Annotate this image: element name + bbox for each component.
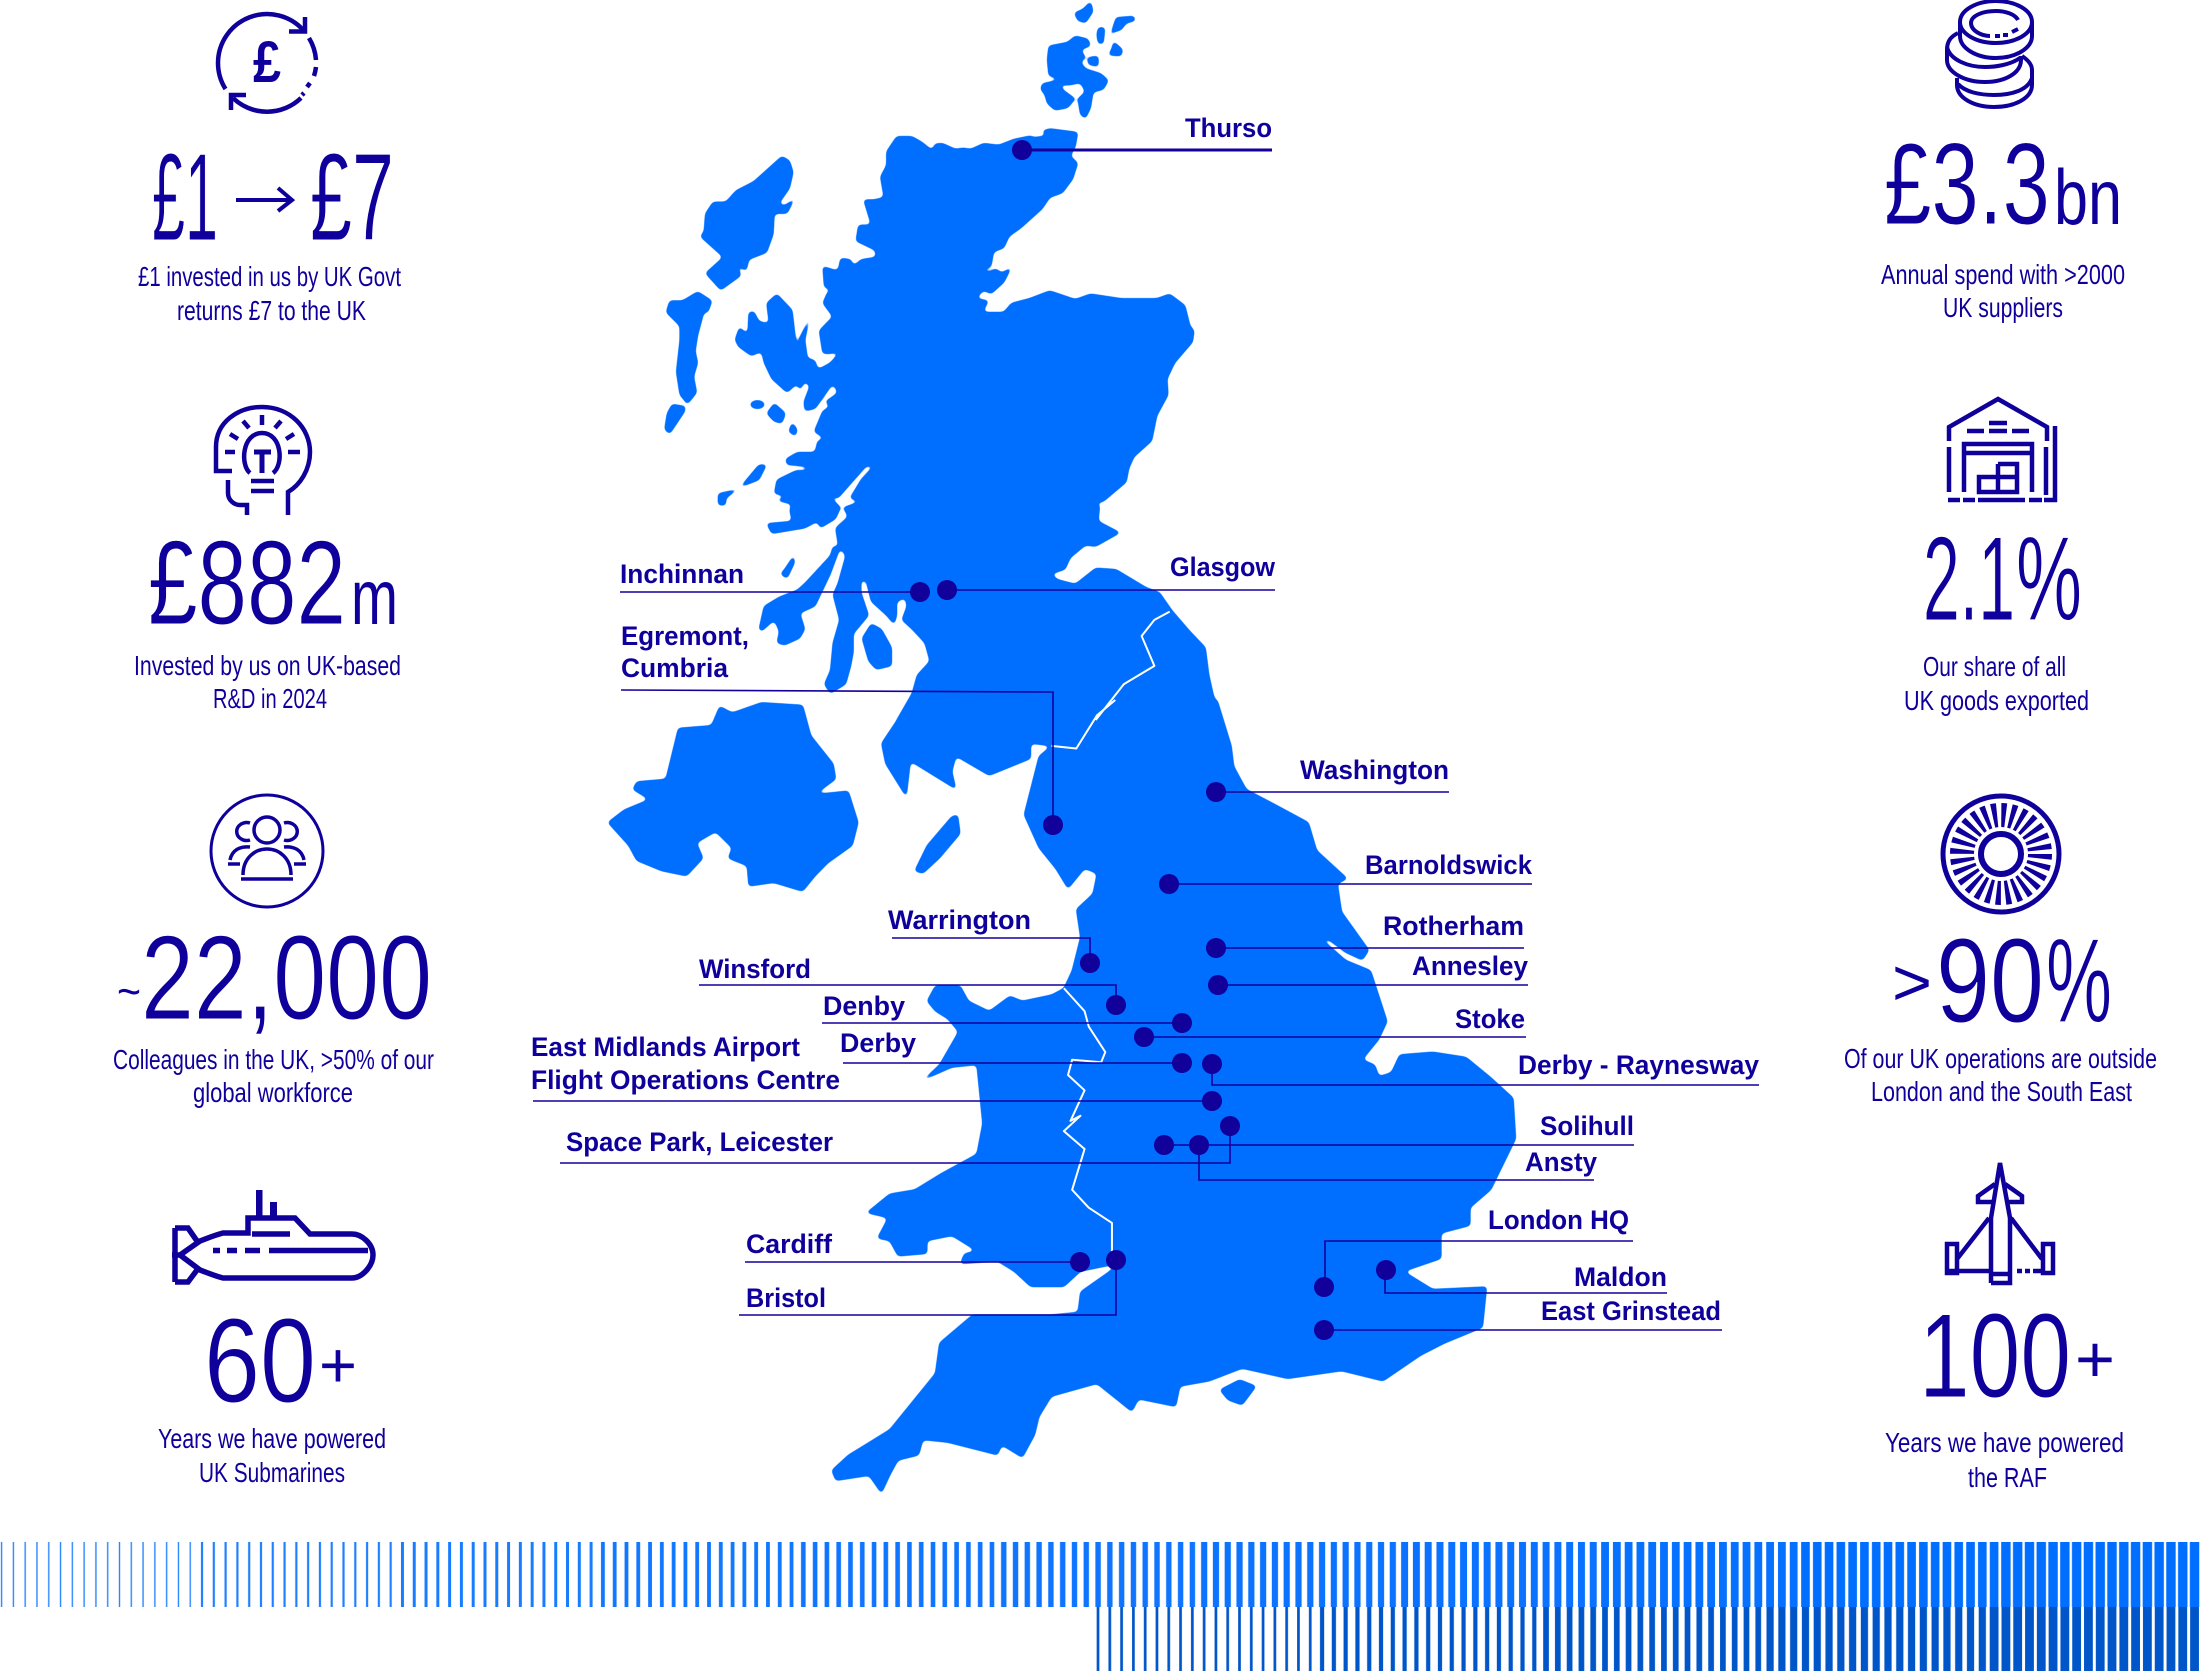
site: Egremont, Cumbria (621, 621, 1063, 835)
caption (134, 650, 401, 714)
site: Rotherham: Rotherham (1383, 911, 1524, 941)
site: Maldon: Maldon (1574, 1262, 1667, 1292)
site: East Grinstead (1314, 1296, 1722, 1340)
caption: Years we have powered (1885, 1427, 2124, 1458)
caption: the RAF (1968, 1462, 2047, 1493)
site: Cardiff (745, 1229, 1090, 1272)
map: Scotland and islands (665, 1, 1221, 720)
site: East Midlands Airport Flight Operations Centre: East Midlands Airport (531, 1032, 800, 1062)
site markers and labels (531, 113, 1759, 1340)
stat: 60+ years submarines (158, 1190, 386, 1488)
caption: R&D in 2024 (213, 683, 327, 714)
icon: stack of coins (1947, 1, 2032, 107)
headline figure: > (1892, 945, 1932, 1019)
icon: warehouse (1948, 399, 2057, 502)
site: Barnoldswick: Barnoldswick (1365, 850, 1533, 880)
site: Rotherham (1206, 911, 1524, 958)
caption (1844, 1043, 2157, 1107)
stat: £3.3bn (1881, 1, 2125, 323)
site: Stoke (1134, 1004, 1526, 1047)
site: Thurso (1012, 113, 1272, 160)
caption (158, 1423, 386, 1488)
caption: £1 invested in us by UK Govt (138, 261, 401, 292)
site: East Midlands Airport Flight Operations Centre (531, 1032, 1222, 1111)
stat: 100+ years RAF (1885, 1163, 2124, 1493)
caption: returns £7 to the UK (177, 295, 366, 326)
site: East Grinstead: East Grinstead (1541, 1296, 1721, 1326)
site: Washington: Washington (1300, 755, 1449, 785)
headline figure: % (2016, 512, 2082, 646)
icon: people in circle (211, 795, 323, 907)
caption (1904, 651, 2089, 716)
headline figure: bn (2054, 153, 2122, 241)
headline figure: % (2046, 914, 2112, 1048)
site: Annesley: Annesley (1412, 951, 1528, 981)
icon: turbine fan (1943, 796, 2059, 912)
caption: UK suppliers (1943, 292, 2063, 323)
caption: UK Submarines (199, 1457, 345, 1488)
caption (1881, 259, 2125, 323)
headline figure: 100 (1919, 1289, 2071, 1423)
map landmass (608, 1, 1516, 1493)
caption (138, 261, 401, 326)
site: London HQ: London HQ (1488, 1205, 1629, 1235)
caption: Our share of all (1923, 651, 2066, 682)
site: Ansty (1189, 1135, 1597, 1180)
headline figure: + (2075, 1322, 2115, 1396)
site: Denby (822, 991, 1192, 1033)
caption: global workforce (193, 1077, 353, 1108)
headline figure: m (351, 553, 398, 641)
site: Derby - Raynesway (1202, 1050, 1759, 1085)
site: Inchinnan (620, 559, 930, 602)
caption (1885, 1427, 2124, 1493)
site: Bristol: Bristol (746, 1283, 826, 1313)
headline figure: + (319, 1329, 357, 1401)
site: Stoke: Stoke (1455, 1004, 1525, 1034)
site: Solihull (1154, 1111, 1634, 1155)
site: Thurso: Thurso (1185, 113, 1272, 143)
site: Inchinnan: Inchinnan (620, 559, 744, 589)
headline figure: £7 (310, 129, 394, 267)
icon: head with light bulb (216, 407, 310, 515)
headline figure: 22,000 (141, 911, 432, 1045)
barcode footer band: dark blue (1092, 1607, 2200, 1671)
map: England-Wales and English borders (1051, 700, 1115, 1264)
headline figure: £1 (152, 129, 218, 267)
caption: UK goods exported (1904, 685, 2089, 716)
site: Winsford (699, 954, 1126, 1015)
site: Solihull: Solihull (1540, 1111, 1634, 1141)
map: Scotland-England border (1096, 612, 1170, 720)
headline figure (152, 129, 394, 267)
site: Derby: Derby (840, 1028, 916, 1058)
site: Derby - Raynesway: Derby - Raynesway (1518, 1050, 1759, 1080)
site: Ansty: Ansty (1525, 1147, 1597, 1177)
barcode footer band: light blue (0, 1542, 2200, 1607)
site: Derby (840, 1028, 1192, 1073)
headline figure: 90 (1936, 914, 2044, 1048)
icon: submarine (172, 1190, 373, 1282)
site: Barnoldswick (1159, 850, 1533, 894)
stat: over 90% (1844, 796, 2157, 1107)
icon: circular pound arrows: £ (253, 30, 281, 95)
site: Cardiff: Cardiff (746, 1229, 833, 1259)
caption: Colleagues in the UK, >50% of our (113, 1044, 434, 1075)
icon: circular pound arrows (218, 14, 316, 112)
stat: £1 to £7 (138, 14, 401, 326)
site: Denby: Denby (823, 991, 905, 1021)
site: Egremont, Cumbria: Egremont, (621, 621, 749, 651)
map: England, Wales, Northern Ireland (608, 700, 1516, 1493)
caption: Invested by us on UK-based (134, 650, 401, 681)
site: Washington (1206, 755, 1449, 802)
headline figure: £882 (148, 516, 346, 650)
site: Winsford: Winsford (699, 954, 811, 984)
caption: Annual spend with >2000 (1881, 259, 2125, 290)
stat: 22,000 colleagues (113, 795, 434, 1108)
headline figure: 60 (204, 1294, 316, 1428)
stat: £882m (134, 407, 401, 714)
site: Maldon (1376, 1260, 1667, 1293)
site: Bristol (739, 1250, 1126, 1315)
site: Glasgow: Glasgow (1170, 552, 1276, 582)
headline figure: 2.1 (1923, 512, 2015, 646)
caption (113, 1044, 434, 1108)
stat: 2.1% (1904, 399, 2089, 716)
headline figure: £3.3 (1884, 119, 2050, 249)
site: East Midlands Airport Flight Operations Centre: Flight Operations Centre (531, 1065, 840, 1095)
UK map (608, 1, 1516, 1493)
site: Annesley (1208, 951, 1528, 995)
icon: jet aircraft (1947, 1163, 2053, 1283)
site: Glasgow (937, 552, 1276, 600)
site: Egremont, Cumbria: Cumbria (621, 653, 729, 683)
headline figure: ~ (117, 965, 141, 1017)
site: Warrington: Warrington (888, 905, 1031, 935)
site: Warrington (888, 905, 1100, 973)
site: London HQ (1314, 1205, 1633, 1297)
headline figure (1892, 914, 2112, 1048)
site: Space Park, Leicester (560, 1116, 1240, 1163)
caption: Years we have powered (158, 1423, 386, 1454)
site: Space Park, Leicester: Space Park, Leicester (566, 1127, 833, 1157)
